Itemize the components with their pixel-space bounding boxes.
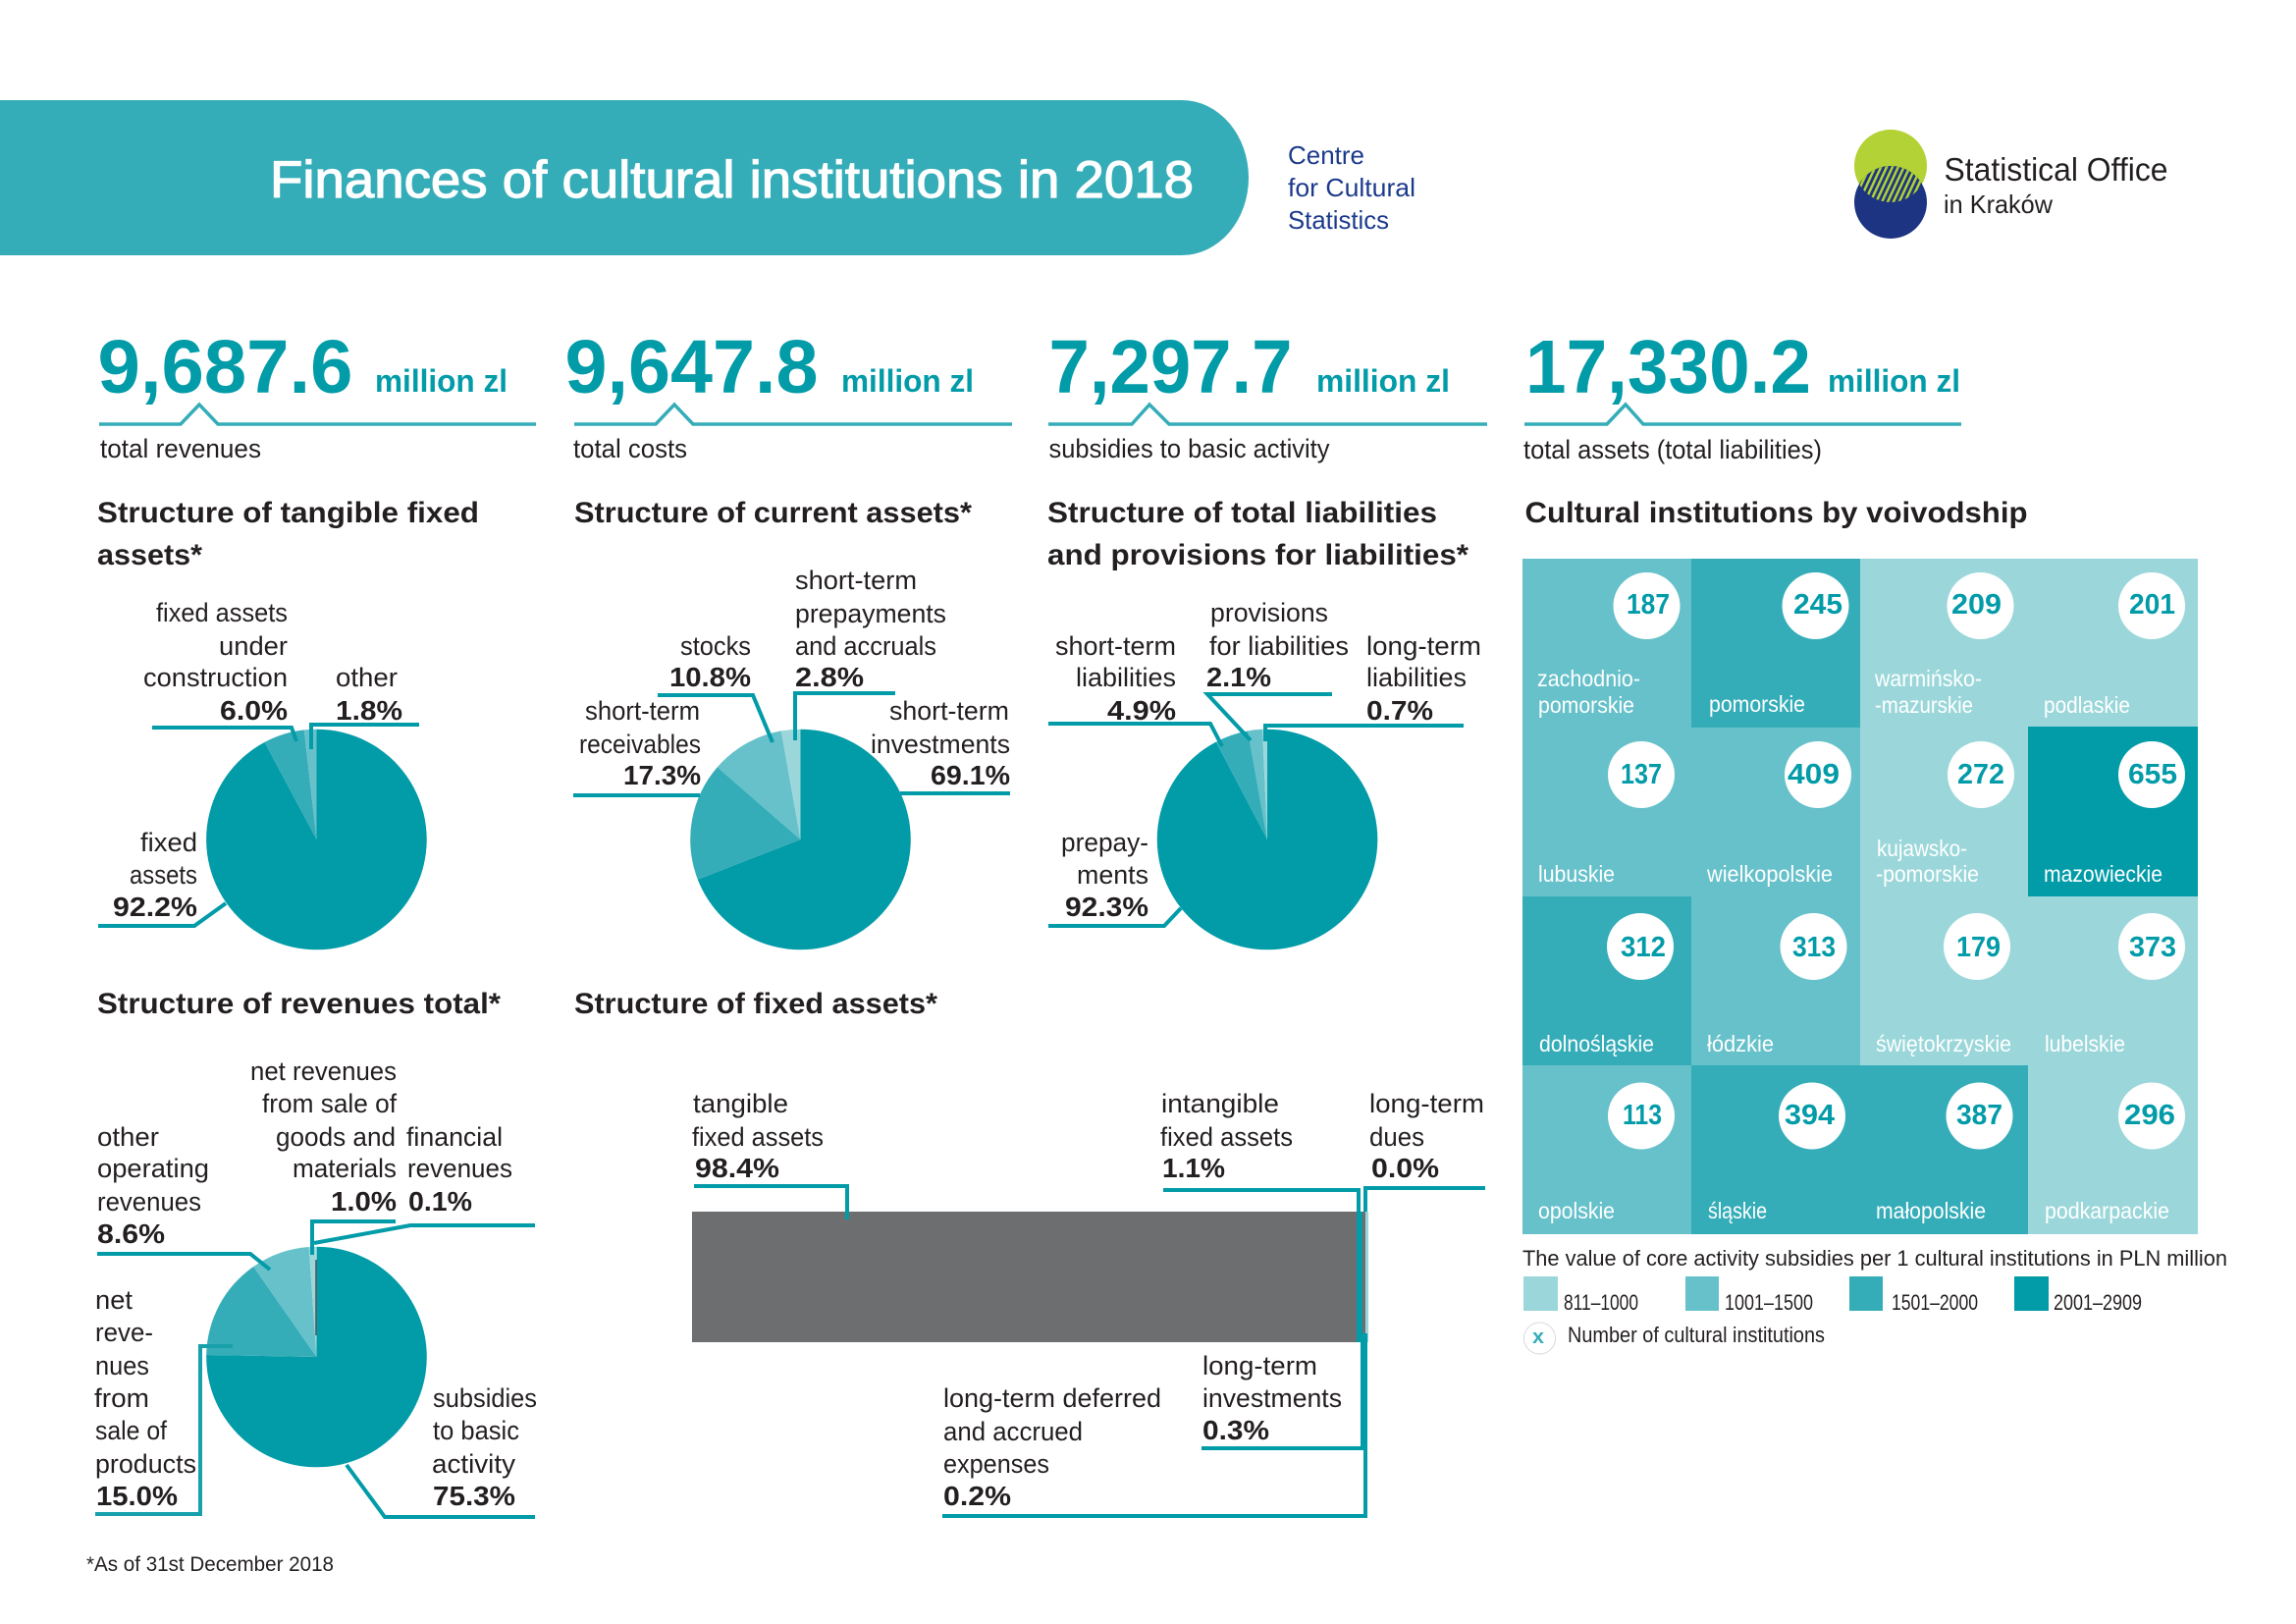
logo: Statistical Office in Kraków: in Kraków: [1944, 189, 2053, 219]
label: short-term prepayments and accruals: [795, 566, 946, 740]
stat: total costs: total costs: [573, 434, 687, 463]
pie chart: total liabilities and provisions: [1048, 598, 1481, 949]
label: tangible fixed assets: [692, 1089, 847, 1219]
podkarpackie: [2045, 1082, 2185, 1223]
lubelskie: 373: [2129, 932, 2176, 963]
logo: Statistical Office in Kraków: [1854, 130, 2167, 239]
label: stocks: [658, 631, 773, 742]
label: long-term dues: dues: [1369, 1122, 1424, 1152]
śląskie: śląskie: [1708, 1198, 1767, 1223]
label: long-term dues: [1365, 1089, 1485, 1212]
tile grid: [1522, 559, 2198, 1234]
małopolskie: małopolskie: [1876, 1198, 1986, 1223]
stat: total costs: million zl: [841, 363, 974, 399]
label: long-term investments: [1201, 1333, 1362, 1448]
kujawsko-pomorskie: kujawsko-: [1877, 836, 1967, 861]
pie chart: revenues total: [94, 1056, 537, 1517]
label: net revenues from sale of goods and materials: 1.0%: [331, 1186, 397, 1217]
heading: structure of total liabilities: Structure of total liabilities: [1047, 497, 1437, 529]
dolnośląskie: 312: [1621, 932, 1666, 963]
label: short-term prepayments and accruals: prepayments: [795, 599, 946, 628]
label: provisions for liabilities: provisions: [1210, 598, 1328, 627]
warmińsko-mazurskie: [1874, 572, 2014, 718]
label: other: [311, 663, 419, 749]
heading: structure of fixed assets: Structure of fixed assets*: [574, 988, 937, 1020]
legend item: 811–1000: [1523, 1276, 1638, 1315]
label: short-term receivables: 17.3%: [623, 760, 701, 790]
łódzkie: 313: [1792, 932, 1836, 963]
label: other operating revenues: 8.6%: [97, 1218, 165, 1249]
świętokrzyskie: 179: [1956, 932, 2001, 963]
label: short-term liabilities: 4.9%: [1107, 695, 1176, 726]
label: long-term liabilities: 0.7%: [1366, 695, 1433, 726]
heading: structure of total liabilities: [1047, 497, 1468, 571]
label: short-term investments: investments: [871, 730, 1010, 759]
label: short-term prepayments and accruals: 2.8%: [795, 662, 864, 692]
label: net revenues from sale of goods and materials: [250, 1056, 397, 1255]
stat: total costs: [565, 325, 1012, 463]
label: net revenues from sale of products: from: [94, 1383, 149, 1413]
label: other operating revenues: revenues: [97, 1187, 201, 1217]
legend item: 1001–1500: 1001–1500: [1725, 1290, 1813, 1315]
label: tangible fixed assets: tangible: [693, 1089, 788, 1118]
label: long-term dues: 0.0%: [1371, 1153, 1439, 1183]
title banner: Finances of cultural institutions in 2018: [270, 151, 1194, 209]
label: financial revenues: financial: [406, 1122, 503, 1152]
label: other operating revenues: [97, 1122, 270, 1270]
label: long-term investments: investments: [1202, 1383, 1342, 1413]
heading: structure of total liabilities: and provisions for liabilities*: [1047, 539, 1468, 571]
pie chart: current assets: [573, 566, 1010, 949]
label: short-term receivables: short-term: [585, 696, 700, 726]
label: other operating revenues: operating: [97, 1154, 209, 1183]
label: fixed assets: fixed: [140, 828, 197, 857]
legend item: 811–1000: 811–1000: [1564, 1290, 1638, 1315]
świętokrzyskie: [1876, 913, 2011, 1056]
lubelskie: [2045, 913, 2185, 1056]
label: net revenues from sale of goods and materials: from sale of: [262, 1089, 397, 1118]
śląskie: [1708, 1082, 1845, 1223]
label: long-term investments: long-term: [1202, 1351, 1317, 1380]
pomorskie: pomorskie: [1709, 691, 1805, 717]
pomorskie: [1709, 572, 1849, 717]
centre name: Statistics: [1288, 205, 1389, 235]
heading: cultural institutions by voivodship: Cultural institutions by voivodship: [1525, 497, 2028, 529]
centre name: Centre: [1288, 140, 1364, 170]
label: prepayments: ments: [1077, 860, 1148, 890]
kujawsko-pomorskie: [1876, 741, 2014, 887]
podlaskie: podlaskie: [2044, 692, 2130, 718]
pie chart: tangible fixed assets: [98, 598, 427, 949]
label: short-term investments: [871, 696, 1010, 793]
wielkopolskie: wielkopolskie: [1706, 861, 1833, 887]
stat: total assets: million zl: [1828, 363, 1960, 399]
małopolskie: 387: [1956, 1100, 2002, 1131]
stacked bar chart: fixed assets: [692, 1089, 1485, 1516]
warmińsko-mazurskie: 209: [1951, 589, 2002, 621]
footnote: *As of 31st December 2018: [86, 1553, 334, 1576]
label: fixed assets under construction: construction: [143, 663, 288, 692]
stat: total revenues: million zl: [375, 363, 507, 399]
heading: structure of tangible fixed assets: [97, 497, 479, 571]
stat: subsidies to basic activity: subsidies to basic activity: [1048, 434, 1330, 463]
centre name: [1288, 140, 1415, 235]
label: prepayments: prepay-: [1061, 828, 1148, 857]
kujawsko-pomorskie: -pomorskie: [1876, 861, 1979, 887]
label: short-term prepayments and accruals: and accruals: [795, 631, 936, 661]
opolskie: 113: [1623, 1100, 1662, 1131]
logo: Statistical Office in Kraków: Statistical Office: [1944, 151, 2167, 188]
label: long-term investments: 0.3%: [1202, 1415, 1269, 1445]
label: intangible fixed assets: [1160, 1089, 1359, 1212]
label: net revenues from sale of goods and materials: net revenues: [250, 1056, 397, 1086]
łódzkie: [1707, 913, 1847, 1056]
lubuskie: 137: [1621, 759, 1662, 790]
łódzkie: łódzkie: [1707, 1031, 1774, 1056]
map legend: [1522, 1246, 2227, 1354]
label: fixed assets under construction: 6.0%: [220, 695, 288, 726]
label: other operating revenues: other: [97, 1122, 159, 1152]
label: long-term deferred and accrued expenses: 0.2%: [943, 1481, 1011, 1511]
świętokrzyskie: świętokrzyskie: [1876, 1031, 2011, 1056]
stat: subsidies to basic activity: million zl: [1316, 363, 1450, 399]
legend item: number of cultural institutions: x: [1532, 1326, 1544, 1348]
mazowieckie: 655: [2128, 759, 2177, 790]
zachodniopomorskie: pomorskie: [1538, 692, 1634, 718]
stat: total assets: total assets (total liabilities): [1523, 435, 1822, 464]
wielkopolskie: 409: [1788, 759, 1840, 790]
label: provisions for liabilities: [1206, 598, 1349, 740]
legend item: number of cultural institutions: [1523, 1323, 1825, 1354]
label: intangible fixed assets: 1.1%: [1162, 1153, 1225, 1183]
heading: structure of revenues total: Structure of revenues total*: [97, 988, 501, 1020]
label: provisions for liabilities: 2.1%: [1206, 662, 1271, 692]
label: financial revenues: [314, 1122, 535, 1243]
małopolskie: [1876, 1082, 2012, 1223]
dolnośląskie: [1539, 913, 1674, 1056]
label: net revenues from sale of goods and materials: goods and: [276, 1122, 396, 1152]
label: subsidies to basic activity: activity: [432, 1449, 515, 1479]
label: intangible fixed assets: intangible: [1161, 1089, 1279, 1118]
label: net revenues from sale of products: reve-: [95, 1318, 153, 1347]
stat: subsidies to basic activity: [1048, 325, 1487, 463]
label: net revenues from sale of products: 15.0%: [96, 1481, 178, 1511]
warmińsko-mazurskie: warmińsko-: [1874, 666, 1982, 691]
label: tangible fixed assets: 98.4%: [695, 1153, 779, 1183]
dolnośląskie: dolnośląskie: [1539, 1031, 1654, 1056]
label: other: other: [336, 663, 398, 692]
lubuskie: [1538, 741, 1675, 887]
zachodniopomorskie: zachodnio-: [1537, 666, 1640, 691]
legend item: 1501–2000: [1849, 1276, 1978, 1315]
wielkopolskie: [1706, 741, 1851, 887]
heading: structure of current assets: Structure of current assets*: [574, 497, 972, 529]
stat: total revenues: total revenues: [100, 434, 261, 463]
zachodniopomorskie: 187: [1627, 589, 1670, 621]
mazowieckie: [2044, 741, 2185, 887]
label: short-term prepayments and accruals: short-term: [795, 566, 917, 595]
label: short-term receivables: receivables: [579, 730, 701, 759]
label: fixed assets: 92.2%: [113, 892, 197, 922]
stat: total revenues: 9,687.6: [98, 325, 353, 409]
label: long-term deferred and accrued expenses: long-term deferred: [943, 1383, 1161, 1413]
label: fixed assets under construction: [143, 598, 296, 741]
label: net revenues from sale of goods and materials: materials: [293, 1154, 397, 1183]
label: stocks: stocks: [680, 631, 751, 661]
label: net revenues from sale of products: [94, 1285, 233, 1514]
label: short-term liabilities: short-term: [1055, 631, 1176, 661]
lubuskie: lubuskie: [1538, 861, 1615, 887]
stat: total costs: 9,647.8: [565, 325, 819, 409]
kujawsko-pomorskie: 272: [1957, 759, 2004, 790]
label: short-term investments: short-term: [889, 696, 1009, 726]
label: intangible fixed assets: fixed assets: [1160, 1122, 1293, 1152]
legend item: 2001–2909: [2014, 1276, 2142, 1315]
label: long-term liabilities: [1265, 631, 1481, 741]
label: fixed assets: assets: [130, 860, 197, 890]
heading: structure of tangible fixed assets: assets*: [97, 539, 202, 571]
label: long-term dues: long-term: [1369, 1089, 1484, 1118]
stat: subsidies to basic activity: 7,297.7: [1048, 325, 1292, 409]
label: tangible fixed assets: fixed assets: [692, 1122, 824, 1152]
label: fixed assets: [98, 828, 226, 926]
label: subsidies to basic activity: [347, 1383, 537, 1517]
label: short-term liabilities: [1048, 631, 1222, 746]
heading: structure of tangible fixed assets: Structure of tangible fixed: [97, 497, 479, 529]
label: prepayments: [1048, 828, 1181, 926]
label: provisions for liabilities: for liabilities: [1209, 631, 1349, 661]
podkarpackie: 296: [2124, 1100, 2175, 1131]
label: fixed assets under construction: under: [219, 631, 288, 661]
legend item: 1501–2000: 1501–2000: [1892, 1290, 1978, 1315]
opolskie: [1538, 1082, 1675, 1223]
legend item: number of cultural institutions: Number of cultural institutions: [1568, 1323, 1825, 1347]
label: subsidies to basic activity: to basic: [433, 1416, 519, 1445]
bar: [692, 1212, 1368, 1342]
label: prepayments: 92.3%: [1065, 892, 1148, 922]
pomorskie: 245: [1793, 589, 1842, 621]
stat: total assets: [1523, 325, 1961, 464]
warmińsko-mazurskie: -mazurskie: [1875, 692, 1973, 718]
label: long-term deferred and accrued expenses: expenses: [943, 1449, 1049, 1479]
label: financial revenues: 0.1%: [408, 1186, 472, 1217]
zachodniopomorskie: [1537, 572, 1681, 718]
label: long-term liabilities: long-term: [1366, 631, 1481, 661]
stat: total revenues: [98, 325, 536, 463]
podkarpackie: podkarpackie: [2045, 1198, 2169, 1223]
voivodship tile map: [1522, 559, 2198, 1234]
podlaskie: [2044, 572, 2185, 718]
label: other: 1.8%: [336, 695, 402, 726]
śląskie: 394: [1785, 1100, 1835, 1131]
label: subsidies to basic activity: 75.3%: [433, 1481, 515, 1511]
label: long-term deferred and accrued expenses: [942, 1333, 1365, 1516]
lubelskie: lubelskie: [2045, 1031, 2125, 1056]
map legend: The value of core activity subsidies per 1 cultural institutions in PLN million: [1522, 1246, 2227, 1271]
legend item: 1001–1500: [1685, 1276, 1813, 1315]
stat: total assets: 17,330.2: [1525, 325, 1811, 409]
label: net revenues from sale of products: products: [95, 1449, 196, 1479]
label: short-term investments: 69.1%: [931, 760, 1010, 790]
label: net revenues from sale of products: net: [95, 1285, 133, 1315]
label: short-term liabilities: liabilities: [1076, 663, 1176, 692]
label: net revenues from sale of products: nues: [95, 1351, 149, 1380]
legend item: 2001–2909: 2001–2909: [2054, 1290, 2142, 1315]
label: short-term receivables: [573, 696, 701, 795]
label: subsidies to basic activity: subsidies: [433, 1383, 537, 1413]
mazowieckie: mazowieckie: [2044, 861, 2163, 887]
opolskie: opolskie: [1538, 1198, 1615, 1223]
label: long-term liabilities: liabilities: [1366, 663, 1467, 692]
label: stocks: 10.8%: [669, 662, 751, 692]
podlaskie: 201: [2129, 589, 2175, 621]
centre name: for Cultural: [1288, 173, 1415, 202]
label: financial revenues: revenues: [407, 1154, 512, 1183]
label: net revenues from sale of products: sale of: [95, 1416, 167, 1445]
label: fixed assets under construction: fixed assets: [156, 598, 288, 627]
label: long-term deferred and accrued expenses: and accrued: [943, 1417, 1083, 1446]
title banner: [0, 100, 1249, 255]
